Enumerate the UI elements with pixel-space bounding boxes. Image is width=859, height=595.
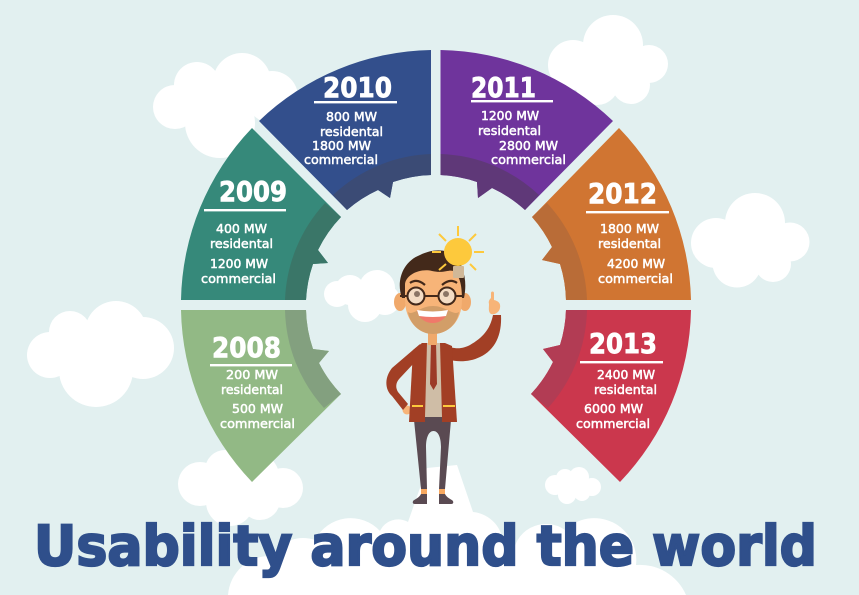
segment: 2013: 2013 [589, 328, 657, 360]
tie [430, 342, 437, 390]
waistband [425, 417, 442, 422]
segment: 2010: 2010 [323, 72, 392, 104]
segment: 2012: 2012 [588, 178, 657, 210]
shoes [413, 494, 453, 504]
segment: 2011: 2011 [471, 72, 536, 104]
glasses bridge and arms [400, 295, 464, 297]
segment: 2012 [532, 128, 691, 300]
segment: 2008: 500 MW [232, 401, 283, 416]
segment: 2013: 6000 MW [584, 401, 643, 416]
segment: 2010: 1800 MW [312, 138, 371, 153]
segment: 2011: 2800 MW [499, 138, 558, 153]
character: businessman pointing up [386, 226, 501, 504]
cloud: small bottom right [545, 467, 601, 504]
segment: 2008: 200 MW [226, 367, 278, 382]
segment: 2013 [531, 310, 691, 482]
cloud: left [27, 301, 174, 407]
title: Usability around the world [34, 514, 817, 578]
eyebrows [410, 281, 457, 285]
segment: 2009: commercial [201, 271, 276, 286]
lightbulb [444, 238, 472, 266]
segment: 2009: residental [210, 236, 273, 251]
cloud: big bottom with peak [228, 465, 686, 595]
cloud: centre behind character [324, 270, 400, 322]
segment: 2009: 1200 MW [210, 256, 268, 271]
segment: 2012: 1800 MW [600, 221, 659, 236]
face [405, 270, 462, 334]
trousers [414, 420, 451, 489]
segment: 2009: 400 MW [216, 221, 267, 236]
hair back [400, 250, 465, 298]
cloud: bottom left [178, 450, 303, 526]
segment: 2011: 1200 MW [481, 108, 539, 123]
pockets [412, 405, 455, 407]
segment: 2012: residental [598, 236, 661, 251]
segment: 2009: 2009 [219, 176, 287, 208]
jacket [409, 343, 457, 422]
cloud: top right [548, 15, 668, 105]
left hand [402, 406, 412, 414]
neck [428, 328, 437, 345]
segment: 2010: 800 MW [326, 109, 377, 124]
eyes [414, 291, 420, 297]
segment: 2008: residental [221, 382, 283, 397]
segment: 2012: commercial [598, 271, 673, 286]
segment: 2013: commercial [576, 416, 650, 431]
lightbulb base [453, 266, 464, 278]
socks [421, 489, 445, 495]
segment: 2010: residental [320, 124, 383, 139]
segment: 2008: commercial [220, 416, 295, 431]
glasses [408, 288, 456, 304]
beard [408, 306, 459, 334]
shirt [425, 343, 442, 417]
mouth [417, 310, 448, 323]
left arm [386, 344, 420, 410]
segment: 2013: 2400 MW [597, 367, 655, 382]
segment: 2011: residental [478, 123, 541, 138]
ears [394, 293, 406, 311]
segment: 2008: 2008 [212, 332, 281, 364]
segment: 2011: commercial [491, 152, 566, 167]
segment: 2009 [181, 128, 341, 300]
segment: 2010 [259, 50, 431, 210]
right arm [442, 315, 501, 361]
segment: 2012: 4200 MW [607, 256, 665, 271]
lightbulb rays [432, 226, 484, 270]
segment: 2008 [181, 310, 341, 482]
segment: 2011 [440, 50, 613, 210]
segment: 2013: residental [594, 382, 657, 397]
pointing hand [489, 292, 500, 314]
cloud: top left [153, 53, 298, 158]
segment: 2010: commercial [304, 152, 378, 167]
cloud: right [691, 193, 810, 288]
